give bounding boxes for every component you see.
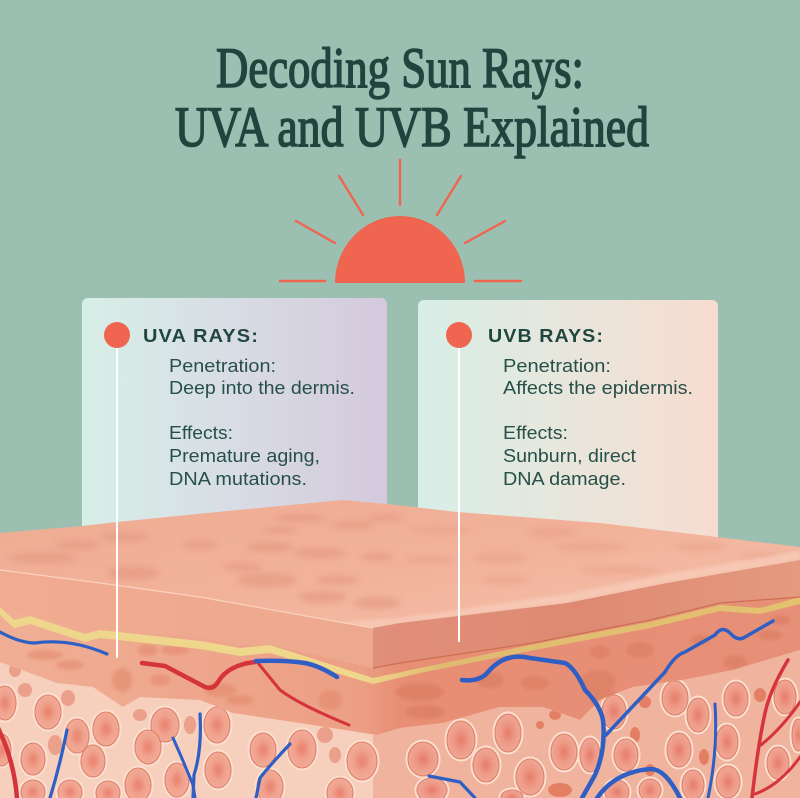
highlight strip along the front edge (340, 551, 800, 628)
blood vessels: red (0, 660, 800, 798)
text: UVA details (169, 356, 355, 489)
text: UVB details: Penetration: (503, 356, 611, 376)
skin slab: front left face (0, 570, 373, 668)
top edge highlight (0, 570, 373, 628)
title: Decoding Sun Rays: (216, 37, 584, 100)
yellow fat band (0, 597, 800, 684)
callout marker: UVA (104, 322, 130, 658)
text: UVB details: Sunburn, direct (503, 446, 636, 466)
text: UVA details: Premature aging, (169, 446, 320, 466)
dermis layer (0, 590, 800, 770)
skin slab: top surface (0, 495, 800, 635)
text: UVA details: Penetration: (169, 356, 276, 376)
panel: UVA rays (82, 298, 387, 548)
dark shadow line under the right slab (373, 597, 800, 668)
text: UVA details: Deep into the dermis. (169, 378, 355, 398)
illustration: skin cross-section (0, 495, 800, 798)
callout marker: UVB (446, 322, 472, 642)
blood vessels: blue (0, 621, 773, 798)
icon: sun (280, 160, 521, 283)
hypodermis layer with fat cells (0, 640, 800, 798)
heading: UVB rays: UVB RAYS: (488, 326, 604, 346)
heading: UVA rays: UVA RAYS: (143, 326, 259, 346)
text: UVA details: Effects: (169, 423, 233, 443)
skin slab: front right face (373, 560, 800, 668)
text: UVA details: DNA mutations. (169, 469, 307, 489)
title (175, 37, 649, 159)
fat cells: body (0, 680, 800, 798)
fat cells: pale halo (0, 680, 800, 798)
text: UVB details (503, 356, 693, 489)
text: UVB details: Affects the epidermis. (503, 378, 693, 398)
text: UVB details: Effects: (503, 423, 568, 443)
panel: UVB rays (418, 300, 718, 550)
title: UVA and UVB Explained (175, 96, 649, 159)
text: UVB details: DNA damage. (503, 469, 626, 489)
